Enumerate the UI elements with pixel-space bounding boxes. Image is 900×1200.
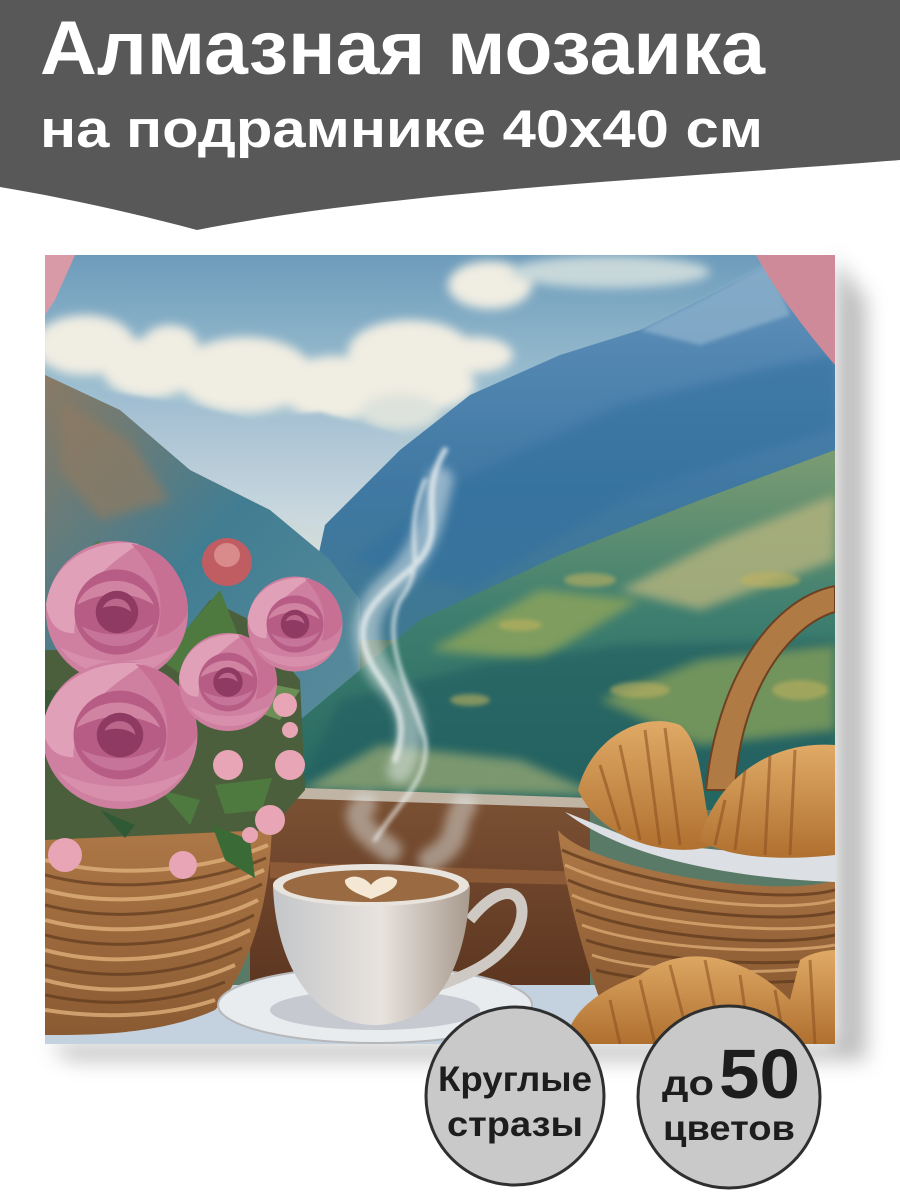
- canvas shadow: [48, 258, 866, 1060]
- window sill: [250, 790, 590, 995]
- valley hills: [270, 450, 835, 810]
- foliage: [45, 600, 305, 840]
- distant mountains: [115, 392, 384, 432]
- rising steam: [358, 480, 465, 860]
- napkin: [565, 812, 835, 882]
- blue mountains: [300, 258, 835, 640]
- roses: [46, 541, 188, 683]
- sky: [45, 255, 763, 552]
- header banner: [0, 0, 900, 230]
- curtains: [45, 255, 75, 315]
- clouds: [35, 256, 710, 430]
- badge: round rhinestones: [426, 1007, 604, 1185]
- small pink flowers: [48, 693, 305, 879]
- badge: round rhinestones: Круглые: [438, 1060, 592, 1099]
- badge: up to 50 colours: цветов: [663, 1109, 795, 1148]
- subtitle: на подрамнике 40х40 см: [40, 100, 763, 159]
- croissants: [578, 721, 715, 850]
- left mountain: [45, 375, 360, 720]
- painting: [35, 255, 835, 1045]
- saucer and cup: [218, 864, 532, 1043]
- badge: up to 50 colours: до: [662, 1064, 714, 1103]
- right basket: [558, 586, 835, 1044]
- bouquet: [43, 538, 343, 879]
- badge: round rhinestones: стразы: [447, 1105, 583, 1144]
- badge: up to 50 colours: [638, 1006, 820, 1188]
- left basket: [45, 815, 272, 1035]
- table: [45, 985, 598, 1044]
- title: Алмазная мозаика: [40, 6, 766, 91]
- badge: up to 50 colours: 50: [719, 1035, 800, 1113]
